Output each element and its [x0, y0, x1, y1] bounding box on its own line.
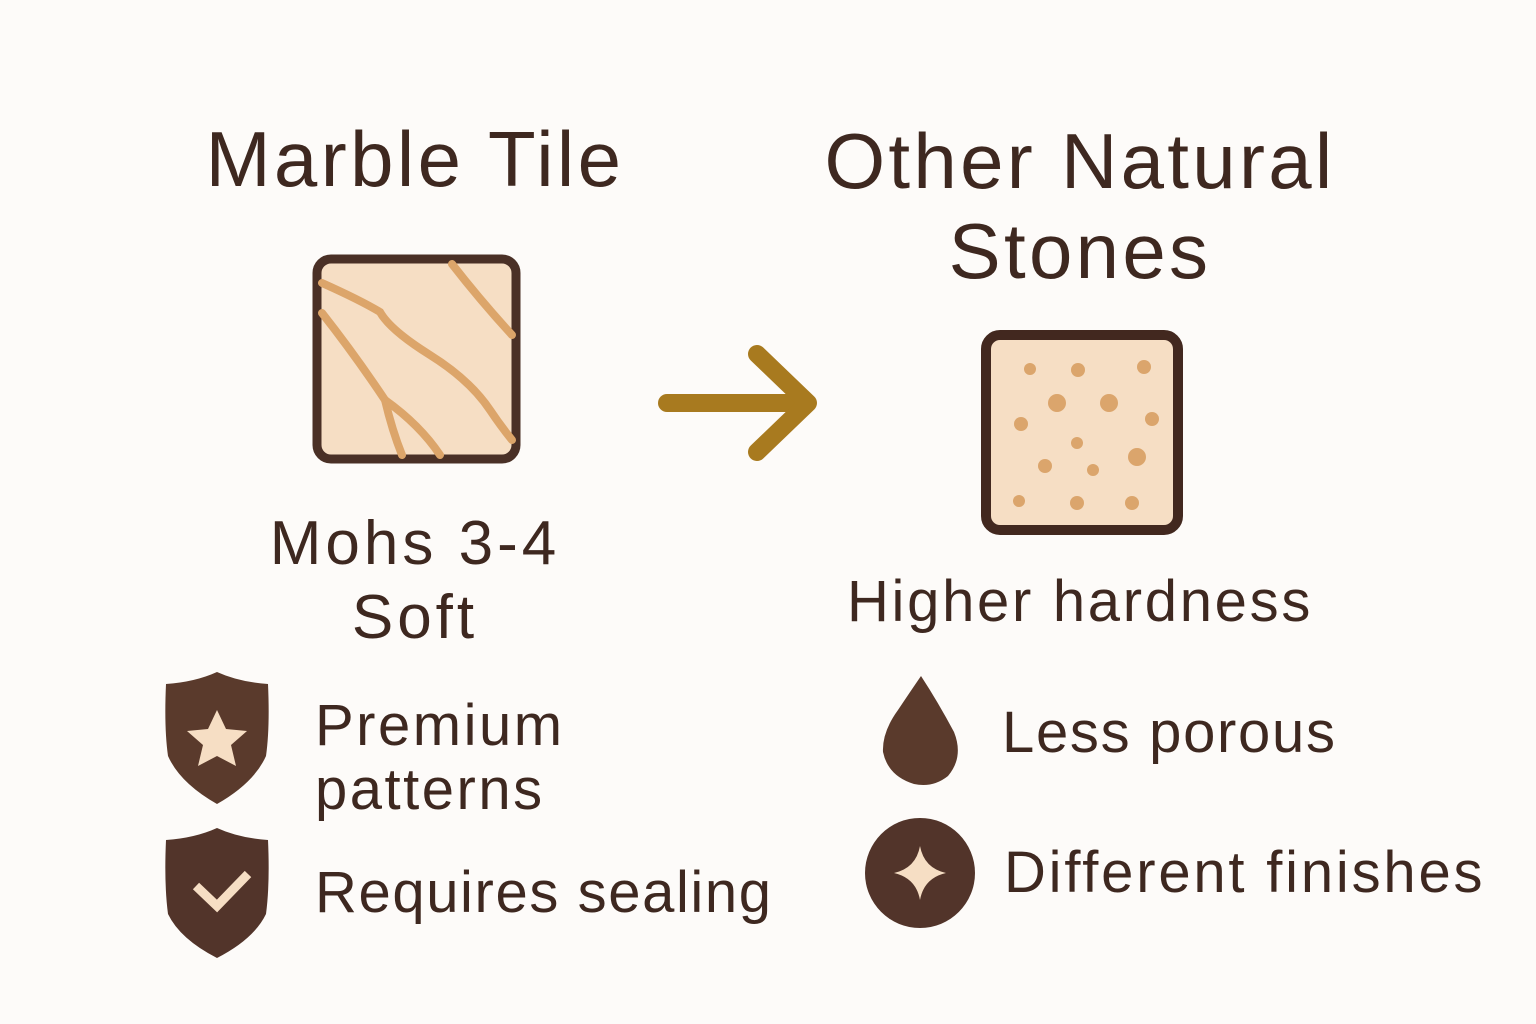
icon: drop — [882, 676, 958, 785]
text: different finishes: Different finishes — [1004, 840, 1485, 905]
text: premium patterns: Premium — [315, 693, 565, 758]
title: other natural stones: Other Natural — [824, 117, 1336, 205]
text: requires sealing: Requires sealing — [315, 860, 773, 925]
text: less porous: Less porous — [1002, 700, 1337, 765]
icon: circle sparkle — [865, 818, 975, 928]
text: mohs: Mohs 3-4 — [270, 509, 560, 578]
icon: shield check — [165, 828, 269, 958]
title: other natural stones: Stones — [949, 207, 1211, 295]
text: premium patterns: patterns — [315, 757, 545, 822]
title: other natural stones — [824, 117, 1336, 295]
icon: shield star — [165, 672, 269, 804]
text: premium patterns — [315, 693, 565, 822]
title: marble tile: Marble Tile — [206, 115, 624, 203]
text: mohs — [270, 509, 560, 652]
text: higher hardness: Higher hardness — [847, 569, 1313, 634]
text: mohs: Soft — [352, 583, 478, 652]
